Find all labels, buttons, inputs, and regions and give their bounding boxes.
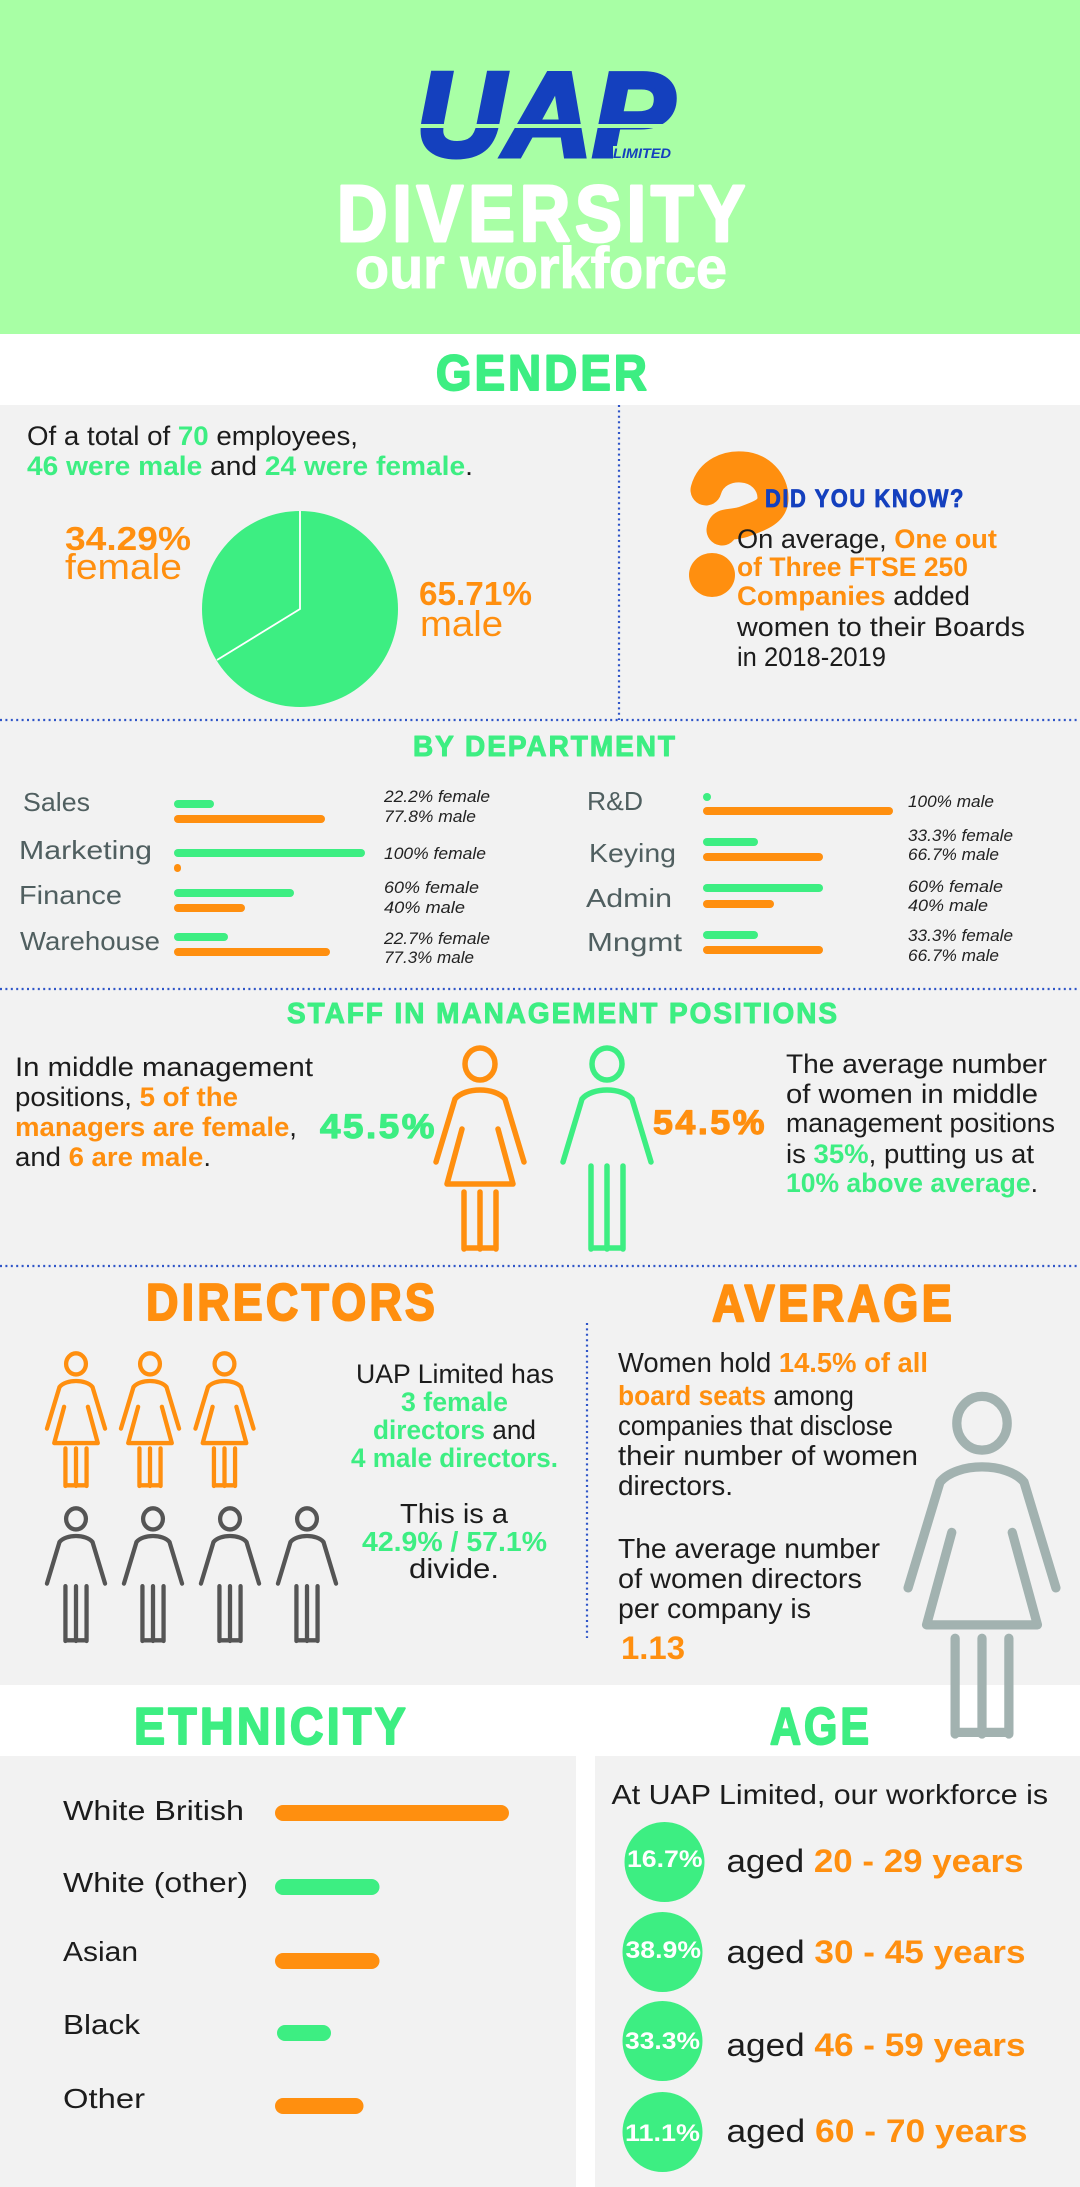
label: male share (419, 575, 532, 644)
row: Finance (19, 878, 479, 917)
row: aged 30-45 (622, 1912, 1026, 1992)
row: Keying (589, 826, 1013, 868)
row: White (other): White (other) (63, 1867, 248, 1898)
title: DIVERSITY (337, 169, 750, 258)
row: Keying: Keying (589, 838, 676, 868)
label: male share: male (420, 603, 503, 644)
row: aged 46-59 (622, 2001, 1026, 2081)
row: Other (63, 2083, 364, 2114)
text: middle management counts: positions, 5 of the (15, 1082, 238, 1112)
row: Admin: 60% female (908, 877, 1003, 896)
panel: average (618, 1275, 955, 1666)
text: FTSE fact: Companies added (737, 581, 970, 611)
row: Other: Other (63, 2083, 145, 2114)
row: aged 60-70 (622, 2092, 1028, 2172)
text: FTSE fact: On average, One out (737, 524, 997, 554)
text: middle management counts: In middle management (15, 1052, 314, 1082)
subtitle: our workforce (355, 236, 727, 301)
heading: ethnicity: ETHNICITY (134, 1698, 409, 1756)
text: employee totals: 46 were male and 24 were female . (27, 451, 473, 481)
logo: UAP Limited: LIMITED (613, 145, 671, 161)
text: employee totals: Of a total of 70 employees, (27, 421, 358, 451)
text: average per company: per company is (618, 1593, 811, 1624)
text: board seats: their number of women (618, 1440, 918, 1471)
row: Warehouse: 77.3% male (384, 948, 474, 967)
text: average comparison (786, 1049, 1055, 1198)
row: aged 46-59: 33.3% (625, 2028, 700, 2055)
text: average comparison: The average number (786, 1049, 1047, 1079)
text: director counts: UAP Limited has (356, 1359, 554, 1389)
row: R&D (587, 786, 994, 816)
text: average comparison: is 35%, putting us at (786, 1139, 1035, 1169)
label: female share: 34.29% (65, 520, 191, 557)
row: White (other) (63, 1867, 380, 1898)
text: employee totals (27, 421, 473, 481)
row: Black: Black (63, 2009, 141, 2040)
panel: by department (19, 731, 1013, 967)
row: Marketing: 100% female (384, 844, 486, 863)
row: aged 30-45: 38.9% (626, 1937, 701, 1964)
logo: UAP Limited: UAP (416, 48, 675, 182)
text: average comparison: 10% above average. (786, 1168, 1038, 1198)
chart: gender pie (202, 511, 398, 707)
text: board seats (618, 1347, 928, 1501)
row: Mngmt: 66.7% male (908, 946, 999, 965)
text: board seats: companies that disclose (618, 1410, 893, 1441)
row: R&D: R&D (587, 786, 643, 816)
row: Finance: Finance (19, 880, 122, 910)
text: FTSE fact: in 2018-2019 (737, 642, 886, 672)
text: FTSE fact: of Three FTSE 250 (737, 552, 968, 582)
row: Mngmt (587, 926, 1013, 965)
row: Keying: 33.3% female (908, 826, 1013, 845)
text: FTSE fact (736, 524, 1025, 672)
row: aged 20-29: aged 20 - 29 years (726, 1843, 1024, 1879)
text: director counts: 3 female (401, 1387, 508, 1417)
icons: male directors (47, 1508, 336, 1641)
stat: 54.5%: 54.5% (653, 1104, 767, 1142)
row: aged 60-70: aged 60 - 70 years (726, 2113, 1028, 2149)
text: director counts (351, 1359, 558, 1473)
row: Black (63, 2009, 331, 2041)
text: director divide: This is a (400, 1498, 508, 1529)
panel: ethnicity (0, 1756, 576, 2187)
icons: female directors (47, 1353, 254, 1486)
panel: header banner (0, 0, 1080, 334)
label: male share: 65.71% (419, 575, 532, 612)
heading: directors: DIRECTORS (146, 1274, 438, 1332)
row: Mngmt: Mngmt (587, 927, 683, 957)
text: middle management counts (15, 1052, 314, 1172)
icon: large woman figure (908, 1396, 1056, 1734)
row: Admin: 40% male (908, 896, 988, 915)
stat: 45.5%: 45.5% (320, 1108, 437, 1146)
row: Admin (586, 877, 1003, 915)
text: middle management counts: managers are female , (15, 1112, 297, 1142)
row: Marketing: Marketing (19, 835, 152, 865)
row: Keying: 66.7% male (908, 845, 999, 864)
panel: age (595, 1756, 1080, 2187)
text: director divide: divide. (409, 1553, 499, 1584)
label: female share (65, 520, 191, 587)
row: White British: White British (63, 1795, 244, 1826)
panel: staff in management positions (15, 998, 1055, 1249)
heading: staff in management: STAFF IN MANAGEMENT POSITIONS (287, 998, 839, 1030)
text: board seats: directors. (618, 1470, 733, 1501)
row: aged 60-70: 11.1% (625, 2120, 700, 2147)
text: board seats: Women hold 14.5% of all (618, 1347, 928, 1378)
row: Sales: 77.8% male (384, 807, 476, 826)
icon: question mark (689, 467, 773, 597)
row: White British (63, 1795, 509, 1826)
text: average comparison: management positions (786, 1108, 1055, 1138)
row: Warehouse (20, 926, 490, 967)
heading: gender: GENDER (436, 345, 650, 401)
heading: age: AGE (770, 1698, 872, 1756)
row: Marketing (19, 835, 486, 872)
text: average per company: of women directors (618, 1563, 862, 1594)
text: average per company: The average number (618, 1533, 880, 1564)
text: age intro: At UAP Limited, our workforce is (612, 1779, 1048, 1810)
panel: grey main background (0, 405, 1080, 1685)
row: Asian (63, 1936, 380, 1969)
icon: man figure (563, 1048, 651, 1249)
row: aged 20-29 (624, 1822, 1024, 1902)
icon: woman figure (436, 1048, 524, 1249)
row: Admin: Admin (586, 883, 672, 913)
row: Warehouse: 22.7% female (383, 929, 490, 948)
text: FTSE fact: women to their Boards (736, 612, 1025, 642)
row: Sales: 22.2% female (383, 787, 490, 806)
row: aged 46-59: aged 46 - 59 years (726, 2027, 1026, 2063)
heading: by department: BY DEPARTMENT (413, 731, 677, 763)
text: middle management counts: and 6 are male. (15, 1142, 211, 1172)
row: Warehouse: Warehouse (20, 926, 160, 956)
text: average per company: 1.13 (621, 1630, 685, 1666)
text: director divide: 42.9% / 57.1% (362, 1526, 547, 1557)
text: director counts: directors and (373, 1415, 536, 1445)
row: Asian: Asian (63, 1936, 138, 1967)
row: Finance: 40% male (384, 898, 465, 917)
row: aged 20-29: 16.7% (627, 1846, 702, 1873)
panel: did you know (689, 467, 1025, 672)
heading: did you know: DID YOU KNOW? (765, 485, 965, 513)
label: female share: female (65, 546, 182, 587)
text: average comparison: of women in middle (786, 1079, 1038, 1109)
panel: directors (47, 1274, 558, 1641)
heading: average: AVERAGE (712, 1275, 955, 1333)
panel: gender totals (27, 421, 532, 707)
text: director divide (362, 1498, 547, 1584)
row: Mngmt: 33.3% female (908, 926, 1013, 945)
text: director counts: 4 male directors. (351, 1443, 558, 1473)
row: Sales (23, 787, 490, 826)
row: R&D: 100% male (908, 792, 994, 811)
text: board seats: board seats among (618, 1380, 854, 1411)
row: aged 30-45: aged 30 - 45 years (726, 1934, 1026, 1970)
row: Sales: Sales (23, 787, 90, 817)
text: average per company (618, 1533, 880, 1666)
row: Finance: 60% female (384, 878, 479, 897)
